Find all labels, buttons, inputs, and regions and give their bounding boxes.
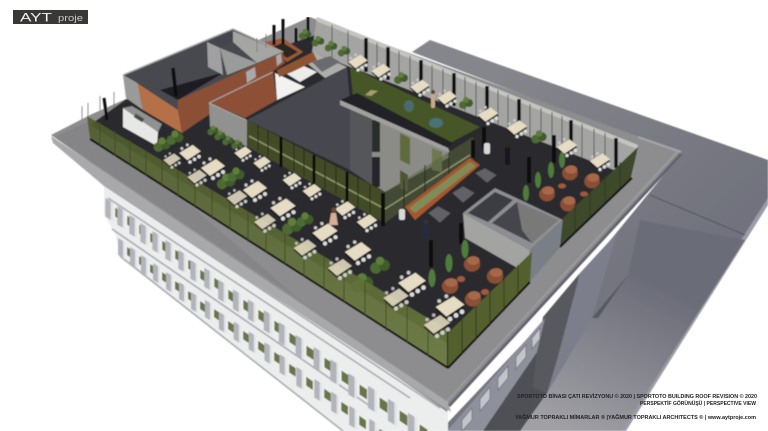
ground glass curtain wall (247, 120, 473, 223)
roof terrace floor (90, 30, 638, 345)
copper wall right (178, 52, 285, 133)
bins and posts (381, 127, 556, 267)
concrete shaft box (463, 188, 563, 284)
planter (405, 158, 480, 220)
copper wall small (210, 72, 277, 118)
central dark wall (247, 67, 350, 170)
glass balustrade right (448, 147, 638, 368)
central roof slab (340, 93, 453, 153)
logo: proje (58, 13, 83, 24)
floor pads (428, 168, 497, 223)
copper wall left (137, 83, 182, 133)
potted plants (154, 126, 390, 292)
grey end wall (123, 75, 143, 110)
window row upper (105, 198, 427, 431)
person upper terrace (431, 90, 435, 108)
kitchen counter (123, 106, 162, 146)
caption: YAĞMUR TOPRAKLI MİMARLAR ® |YAĞMUR TOPRAKLI ARCHITECTS ® | www.aytproje.com (515, 413, 756, 421)
caption: SPORTOTO BİNASI ÇATI REVİZYONU © 2020 | SPORTOTO BUILDING ROOF REVISION © 2020 (517, 393, 757, 400)
cactus planters (428, 152, 565, 287)
logo (13, 10, 88, 24)
glass balustrade front (87, 116, 448, 368)
large room (123, 29, 285, 133)
caption: PERSPEKTİF GÖRÜNÜŞÜ | PERSPECTIVE VIEW (640, 400, 757, 407)
main facade (104, 183, 448, 431)
upper tables and plants (299, 29, 610, 171)
tables against glass (163, 152, 450, 338)
parapet deck (51, 17, 681, 412)
dining tables (179, 143, 464, 321)
logo: AYT (20, 12, 52, 24)
side wall and shadow (483, 233, 628, 431)
upper green glass terrace (350, 67, 480, 143)
caption (515, 393, 757, 421)
back rust room (265, 17, 308, 62)
central block facade (350, 103, 450, 192)
lower adjacent roof (412, 40, 768, 431)
thin railing posts (82, 34, 266, 120)
small copper room and white service rooms (209, 52, 347, 147)
window row lower (118, 238, 386, 431)
people (329, 144, 510, 240)
lounge tub chairs (442, 165, 600, 307)
side facade windows (447, 318, 545, 431)
rear wall with fins (312, 17, 638, 177)
